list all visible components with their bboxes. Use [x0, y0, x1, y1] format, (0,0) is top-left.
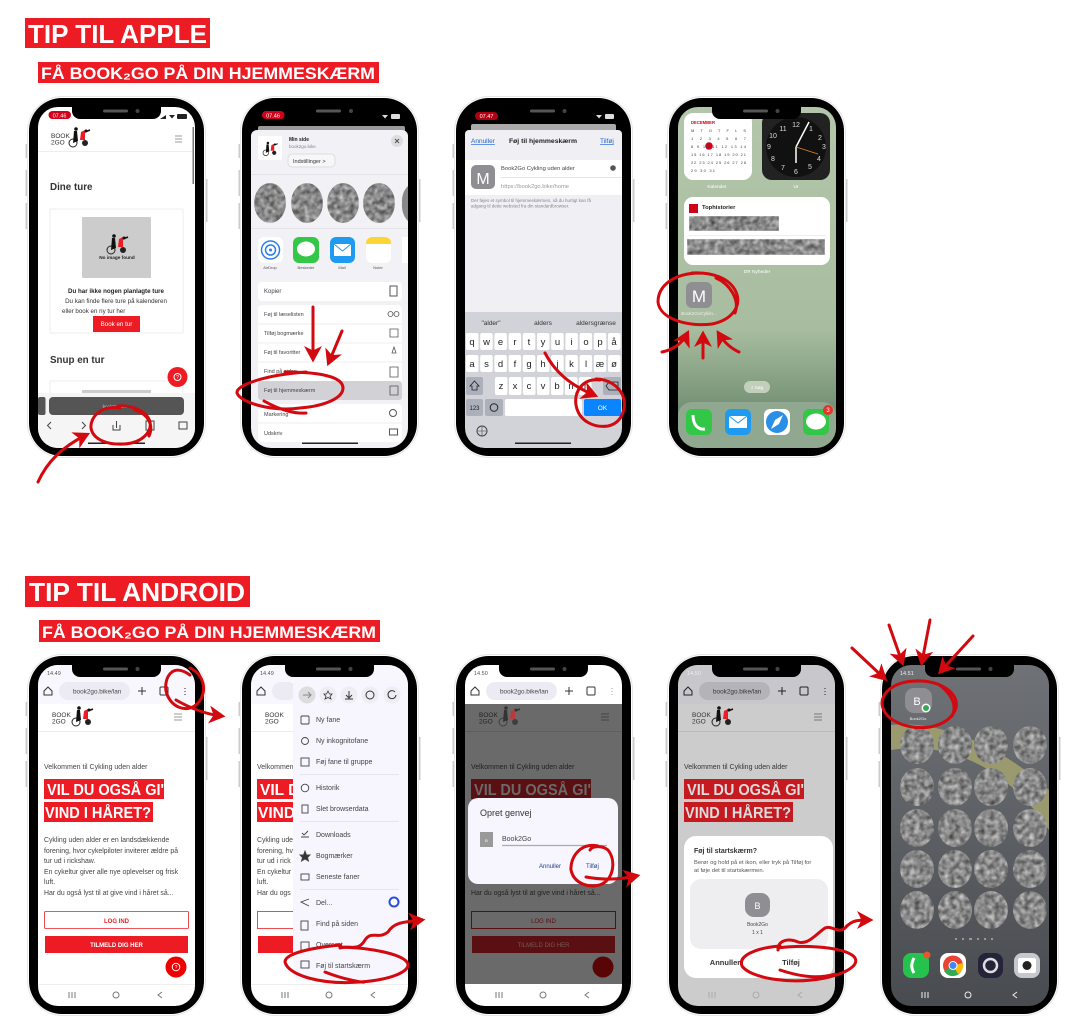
keyboard: ø: [611, 359, 617, 370]
help button: ?: [175, 965, 178, 971]
site header: [38, 706, 195, 732]
clock widget: 7: [781, 165, 785, 172]
buttons: TILMELD DIG HER: [90, 943, 143, 949]
background page: tur ud i rick: [257, 858, 291, 865]
help button: [166, 956, 186, 978]
dock icons: [903, 952, 1040, 978]
form sheet: Føj til hjemmeskærm: [509, 138, 577, 145]
app icon: book2go: M: [692, 287, 706, 306]
body text: luft.: [44, 879, 55, 886]
menu items: Del...: [316, 900, 332, 907]
form sheet: Annuller: [471, 138, 496, 145]
annotation: circle and arrows at top: [852, 620, 973, 728]
menu items: Føj til startskærm: [316, 963, 370, 970]
help button: [168, 367, 188, 387]
body text: Cykling uden alder er en landsdækkende: [44, 837, 169, 844]
sheet header: Indstillinger >: [293, 159, 326, 165]
phone: android step 4 add to home: [666, 654, 869, 1016]
nav bar: [709, 992, 802, 998]
clock widget: 9: [767, 144, 771, 151]
card: no planned trips: Du kan finde flere ture på kalenderen: [65, 298, 167, 305]
calendar widget: 22 23 24 25 26 27 28: [691, 160, 747, 165]
menu items: Ny inkognitofane: [316, 738, 368, 745]
keyboard: 123: [469, 406, 480, 412]
add to home dialog: Berør og hold på et ikon, eller tryk på Tilføj for: [694, 859, 811, 866]
calendar widget: M T O T F L S: [691, 128, 746, 133]
action list: Markering: [264, 412, 288, 418]
phone: apple step 4 home screen: Kalender: [707, 184, 727, 190]
clock widget: 8: [771, 156, 775, 163]
background page: En cykeltur: [257, 869, 292, 876]
phone: apple step 4 home screen: [658, 96, 848, 458]
calendar widget: 15 16 17 18 19 20 21: [691, 152, 747, 157]
keyboard: q: [469, 337, 475, 348]
shortcut dialog: Opret genvej: [480, 808, 532, 818]
action list: Find på siden: [264, 368, 297, 375]
browser toolbar: book2go.bike/lan: [500, 688, 549, 696]
heading: dine ture: Dine ture: [50, 182, 93, 193]
dock: 3: [826, 408, 830, 414]
keyboard: k: [569, 359, 574, 370]
phone: apple step 2 share sheet: [237, 96, 420, 458]
card: no planned trips: eller book en ny tur her: [62, 308, 125, 315]
ok key: [584, 399, 621, 416]
add to home dialog: B: [754, 901, 761, 911]
keyboard: j: [555, 359, 559, 370]
sheet header: book2go.bike: [289, 144, 316, 149]
dimmed page: 2GO: [479, 718, 493, 726]
action list: [258, 282, 402, 442]
dimmed browser: Velkommen til Cykling uden alder: [684, 764, 788, 771]
phone: apple step 1 website: [26, 96, 208, 458]
menu items: [316, 717, 373, 970]
background page: 2GO: [265, 718, 279, 726]
browser toolbar: [471, 671, 612, 700]
shortcut dialog: [468, 798, 618, 884]
phone: apple step 4 home screen: Ur: [793, 184, 799, 190]
dimmed page: TILMELD DIG HER: [517, 943, 570, 949]
keyboard: t: [528, 337, 531, 348]
status bar: [262, 109, 400, 120]
keyboard: o: [583, 337, 589, 348]
app row: Beskeder: [298, 265, 315, 270]
nav bar: [922, 992, 1017, 998]
annotation: circle and arrows on icon: [658, 273, 739, 358]
clock widget: 12: [792, 122, 800, 129]
app row: Noter: [373, 265, 384, 270]
body text: forening, hvor cykelpiloter inviterer ældre på: [44, 847, 178, 855]
blurred app grid: [900, 726, 1047, 929]
add to home dialog: 1 x 1: [752, 930, 763, 936]
menu items: Slet browserdata: [316, 806, 369, 813]
background page: 14.49: [260, 671, 274, 677]
site header: 2GO: [52, 718, 66, 726]
sheet header: Min side: [289, 137, 309, 143]
app icon: book2go: Book2GoCyklin...: [681, 311, 717, 316]
body text: tur ud i rickshaw.: [44, 858, 95, 865]
keyboard: u: [555, 337, 560, 348]
background page: VIND: [258, 805, 295, 822]
clock widget: 1: [809, 126, 813, 133]
action list: Føj til favoritter: [264, 350, 301, 356]
browser toolbar: 14.50: [474, 671, 488, 677]
clock widget: 3: [822, 144, 826, 151]
dock: [678, 402, 836, 448]
background page: luft.: [257, 879, 268, 886]
red headline: VIL DU OGSÅ GI': [47, 782, 164, 799]
keyboard: e: [498, 337, 503, 348]
heading: tip til android: TIP TIL ANDROID: [29, 577, 245, 607]
form sheet: Tilføj: [600, 138, 614, 145]
menu items: Historik: [316, 785, 340, 792]
background page: Cykling ude: [257, 837, 293, 844]
keyboard: a: [469, 359, 475, 370]
logo: [51, 127, 90, 147]
dimmed page: Har du også lyst til at give vind i håret så...: [471, 889, 601, 897]
search pill: ⌕ Søg: [751, 385, 764, 390]
card: no planned trips: No image found: [99, 255, 135, 260]
annotation: circle on add button: [741, 920, 869, 981]
app icon: book2go: [681, 282, 717, 316]
share sheet panel: [251, 130, 408, 448]
keyboard: v: [541, 381, 546, 392]
dimmed browser: BOOK: [692, 712, 711, 719]
action list: Tilføj bogmærke: [264, 331, 304, 337]
shortcut dialog: Tilføj: [586, 864, 599, 870]
arrow: apple first step: [38, 406, 151, 482]
phone: android step 2 chrome menu: [238, 654, 421, 1016]
intro text: Velkommen til Cykling uden alder: [44, 764, 148, 771]
annotation: circle on menu dots: [166, 668, 221, 716]
calendar widget: [684, 113, 752, 180]
keyboard: l: [585, 359, 587, 370]
keyboard: z: [499, 381, 504, 392]
sheet header: [258, 135, 403, 167]
logo: 2GO: [51, 140, 65, 146]
dimmed browser: book2go.bike/lan: [713, 688, 762, 696]
logo: BOOK: [51, 133, 70, 140]
news widget: [684, 197, 830, 265]
clock widget: [762, 113, 830, 180]
blurred contacts: [254, 183, 408, 223]
keyboard: r: [513, 337, 517, 348]
keyboard: m: [581, 381, 589, 392]
background page: [251, 665, 408, 998]
keyboard: i: [570, 337, 573, 348]
dimmed page: [465, 704, 622, 984]
keyboard: [465, 312, 622, 448]
phone: apple step 3 add to home screen: [452, 96, 634, 458]
body text: [44, 837, 179, 897]
card: no planned trips: [50, 209, 183, 333]
form sheet: [465, 130, 622, 312]
menu items: Find på siden: [316, 920, 358, 928]
keyboard: alders: [534, 320, 553, 327]
browser toolbar: 14.49: [47, 671, 61, 677]
status bar: 07.46: [266, 114, 280, 120]
calendar widget: 29 30 31: [691, 168, 716, 173]
action list: Føj til hjemmeskærm: [264, 388, 316, 394]
keyboard: x: [513, 381, 518, 392]
clock widget: 4: [817, 156, 821, 163]
subheading: android: FÅ BOOK₂GO PÅ DIN HJEMMESKÆRM: [42, 623, 376, 642]
keyboard: c: [527, 381, 532, 392]
clock widget: 5: [808, 164, 812, 171]
dimmed page: Velkommen til Cykling uden alder: [471, 764, 575, 771]
clock widget: 11: [779, 126, 787, 133]
keyboard: æ: [596, 359, 605, 370]
keyboard: y: [541, 337, 546, 348]
phone: apple step 4 home screen: DR Nyheder: [744, 269, 771, 275]
search pill: [744, 381, 770, 393]
action list: Kopier: [264, 289, 281, 295]
subheading: apple: FÅ BOOK₂GO PÅ DIN HJEMMESKÆRM: [41, 64, 375, 83]
background page: Har du ogs: [257, 890, 291, 897]
keyboard: s: [484, 359, 489, 370]
card: no planned trips: Book en tur: [101, 321, 132, 328]
body text: Har du også lyst til at give vind i håret så...: [44, 889, 174, 897]
form sheet: M: [476, 171, 490, 188]
keyboard: d: [498, 359, 503, 370]
dimmed browser: VIL DU OGSÅ GI': [687, 782, 804, 799]
shortcut icon: B: [913, 696, 921, 708]
annotation: add to home screen circle: [285, 920, 421, 983]
status bar: 07.46: [53, 114, 66, 120]
shortcut icon: [905, 688, 932, 721]
dimmed browser: 14.50: [687, 671, 701, 677]
ok key: OK: [598, 405, 608, 412]
phone: android step 3 create shortcut: [452, 654, 636, 1016]
add to home dialog: Føj til startskærm?: [694, 848, 757, 855]
status bar: 07.47: [480, 114, 493, 120]
keyboard: f: [514, 359, 517, 370]
clock widget: 2: [818, 135, 822, 142]
menu items: Oversæt: [316, 942, 343, 949]
heading: tip til apple: TIP TIL APPLE: [28, 19, 207, 49]
buttons: [44, 912, 188, 953]
app row: AirDrop: [263, 265, 278, 270]
red headline: VIND I HÅRET?: [45, 805, 151, 822]
annotation: circle on ok key: [545, 353, 624, 426]
red headline: [44, 779, 164, 822]
add to home dialog: Annuller: [710, 958, 740, 967]
keyboard: g: [526, 359, 532, 370]
clock widget: 10: [769, 133, 777, 140]
app row: Mail: [338, 265, 346, 270]
nav bar: [38, 984, 195, 998]
annotation: circle on add: [571, 845, 636, 886]
add to home dialog: Tilføj: [782, 958, 800, 967]
heading: snup en tur: Snup en tur: [50, 355, 105, 366]
menu items: Seneste faner: [316, 874, 360, 881]
add to home dialog: Book2Go: [747, 922, 768, 928]
form sheet: https://book2go.bike/home: [501, 184, 569, 190]
browser toolbar: [38, 665, 195, 704]
form sheet: Book2Go Cykling uden alder: [501, 166, 575, 172]
keyboard: å: [611, 337, 617, 348]
form sheet: Der føjes et symbol til hjemmeskærmen, så du hurtigt kan få: [471, 197, 592, 203]
dimmed page: LOG IND: [531, 919, 557, 925]
menu icons row: [298, 686, 400, 704]
menu items: Downloads: [316, 832, 351, 839]
app row: [258, 237, 408, 270]
add to home dialog: at føje det til startskærmen.: [694, 868, 765, 874]
keyboard: aldersgrænse: [576, 320, 616, 327]
menu items: Bogmærker: [316, 853, 353, 860]
keyboard: "alder": [481, 320, 501, 327]
calendar widget: DECEMBER: [691, 120, 715, 125]
dimmed page: VIL DU OGSÅ GI': [474, 782, 591, 799]
annotation: arrows and circle on add to home screen: [237, 307, 343, 413]
shortcut dialog: Annuller: [539, 864, 561, 870]
status bar: [475, 109, 614, 120]
keyboard: n: [568, 381, 574, 392]
phone: android step 5 home screen: [852, 620, 1060, 1016]
shortcut icon: Book2Go: [910, 716, 927, 721]
card: no planned trips: Du har ikke nogen planlagte ture: [68, 288, 165, 295]
phone: android step 5 home screen: 14.51: [900, 671, 914, 677]
safari bottom bar: [38, 393, 195, 448]
phone: android step 1 website: [26, 654, 221, 1016]
form sheet: adgang til dette websted fra din standardbrowser.: [471, 204, 569, 208]
action list: Føj til læselisten: [264, 312, 304, 318]
dimmed browser: [678, 665, 835, 822]
background page: forening, hv: [257, 848, 294, 855]
browser toolbar: book2go.bike/lan: [73, 688, 122, 696]
keyboard: b: [554, 381, 560, 392]
calendar widget: 8 9 10 11 12 13 14: [691, 144, 747, 149]
keyboard: p: [597, 337, 603, 348]
clock widget: 6: [794, 169, 798, 176]
shortcut dialog: Book2Go: [502, 836, 531, 843]
status bar: [48, 111, 187, 120]
safari bottom bar: book2go.bike: [103, 404, 130, 409]
nav bar: [496, 992, 589, 998]
background page: VIL D: [260, 782, 299, 799]
site header: BOOK: [52, 712, 71, 719]
shortcut dialog: B: [485, 838, 488, 843]
calendar widget: 1 2 3 4 5 6 7: [691, 136, 747, 141]
menu items: Føj fane til gruppe: [316, 759, 373, 766]
body text: En cykeltur giver alle nye oplevelser og frisk: [44, 869, 179, 876]
chrome menu: [293, 680, 408, 980]
dimmed page: BOOK: [479, 712, 498, 719]
dimmed browser: 2GO: [692, 718, 706, 726]
news widget: Tophistorier: [702, 205, 736, 211]
keyboard: h: [540, 359, 546, 370]
help button: ?: [176, 375, 179, 381]
menu item icons: [300, 716, 310, 968]
add to home dialog: [684, 836, 833, 978]
buttons: LOG IND: [104, 919, 130, 925]
background page: BOOK: [265, 712, 284, 719]
action list: Udskriv: [264, 431, 283, 437]
keyboard: w: [482, 337, 490, 348]
background page: Velkommen: [257, 764, 294, 771]
menu items: Ny fane: [316, 717, 340, 724]
dimmed browser: VIND I HÅRET?: [685, 805, 791, 822]
